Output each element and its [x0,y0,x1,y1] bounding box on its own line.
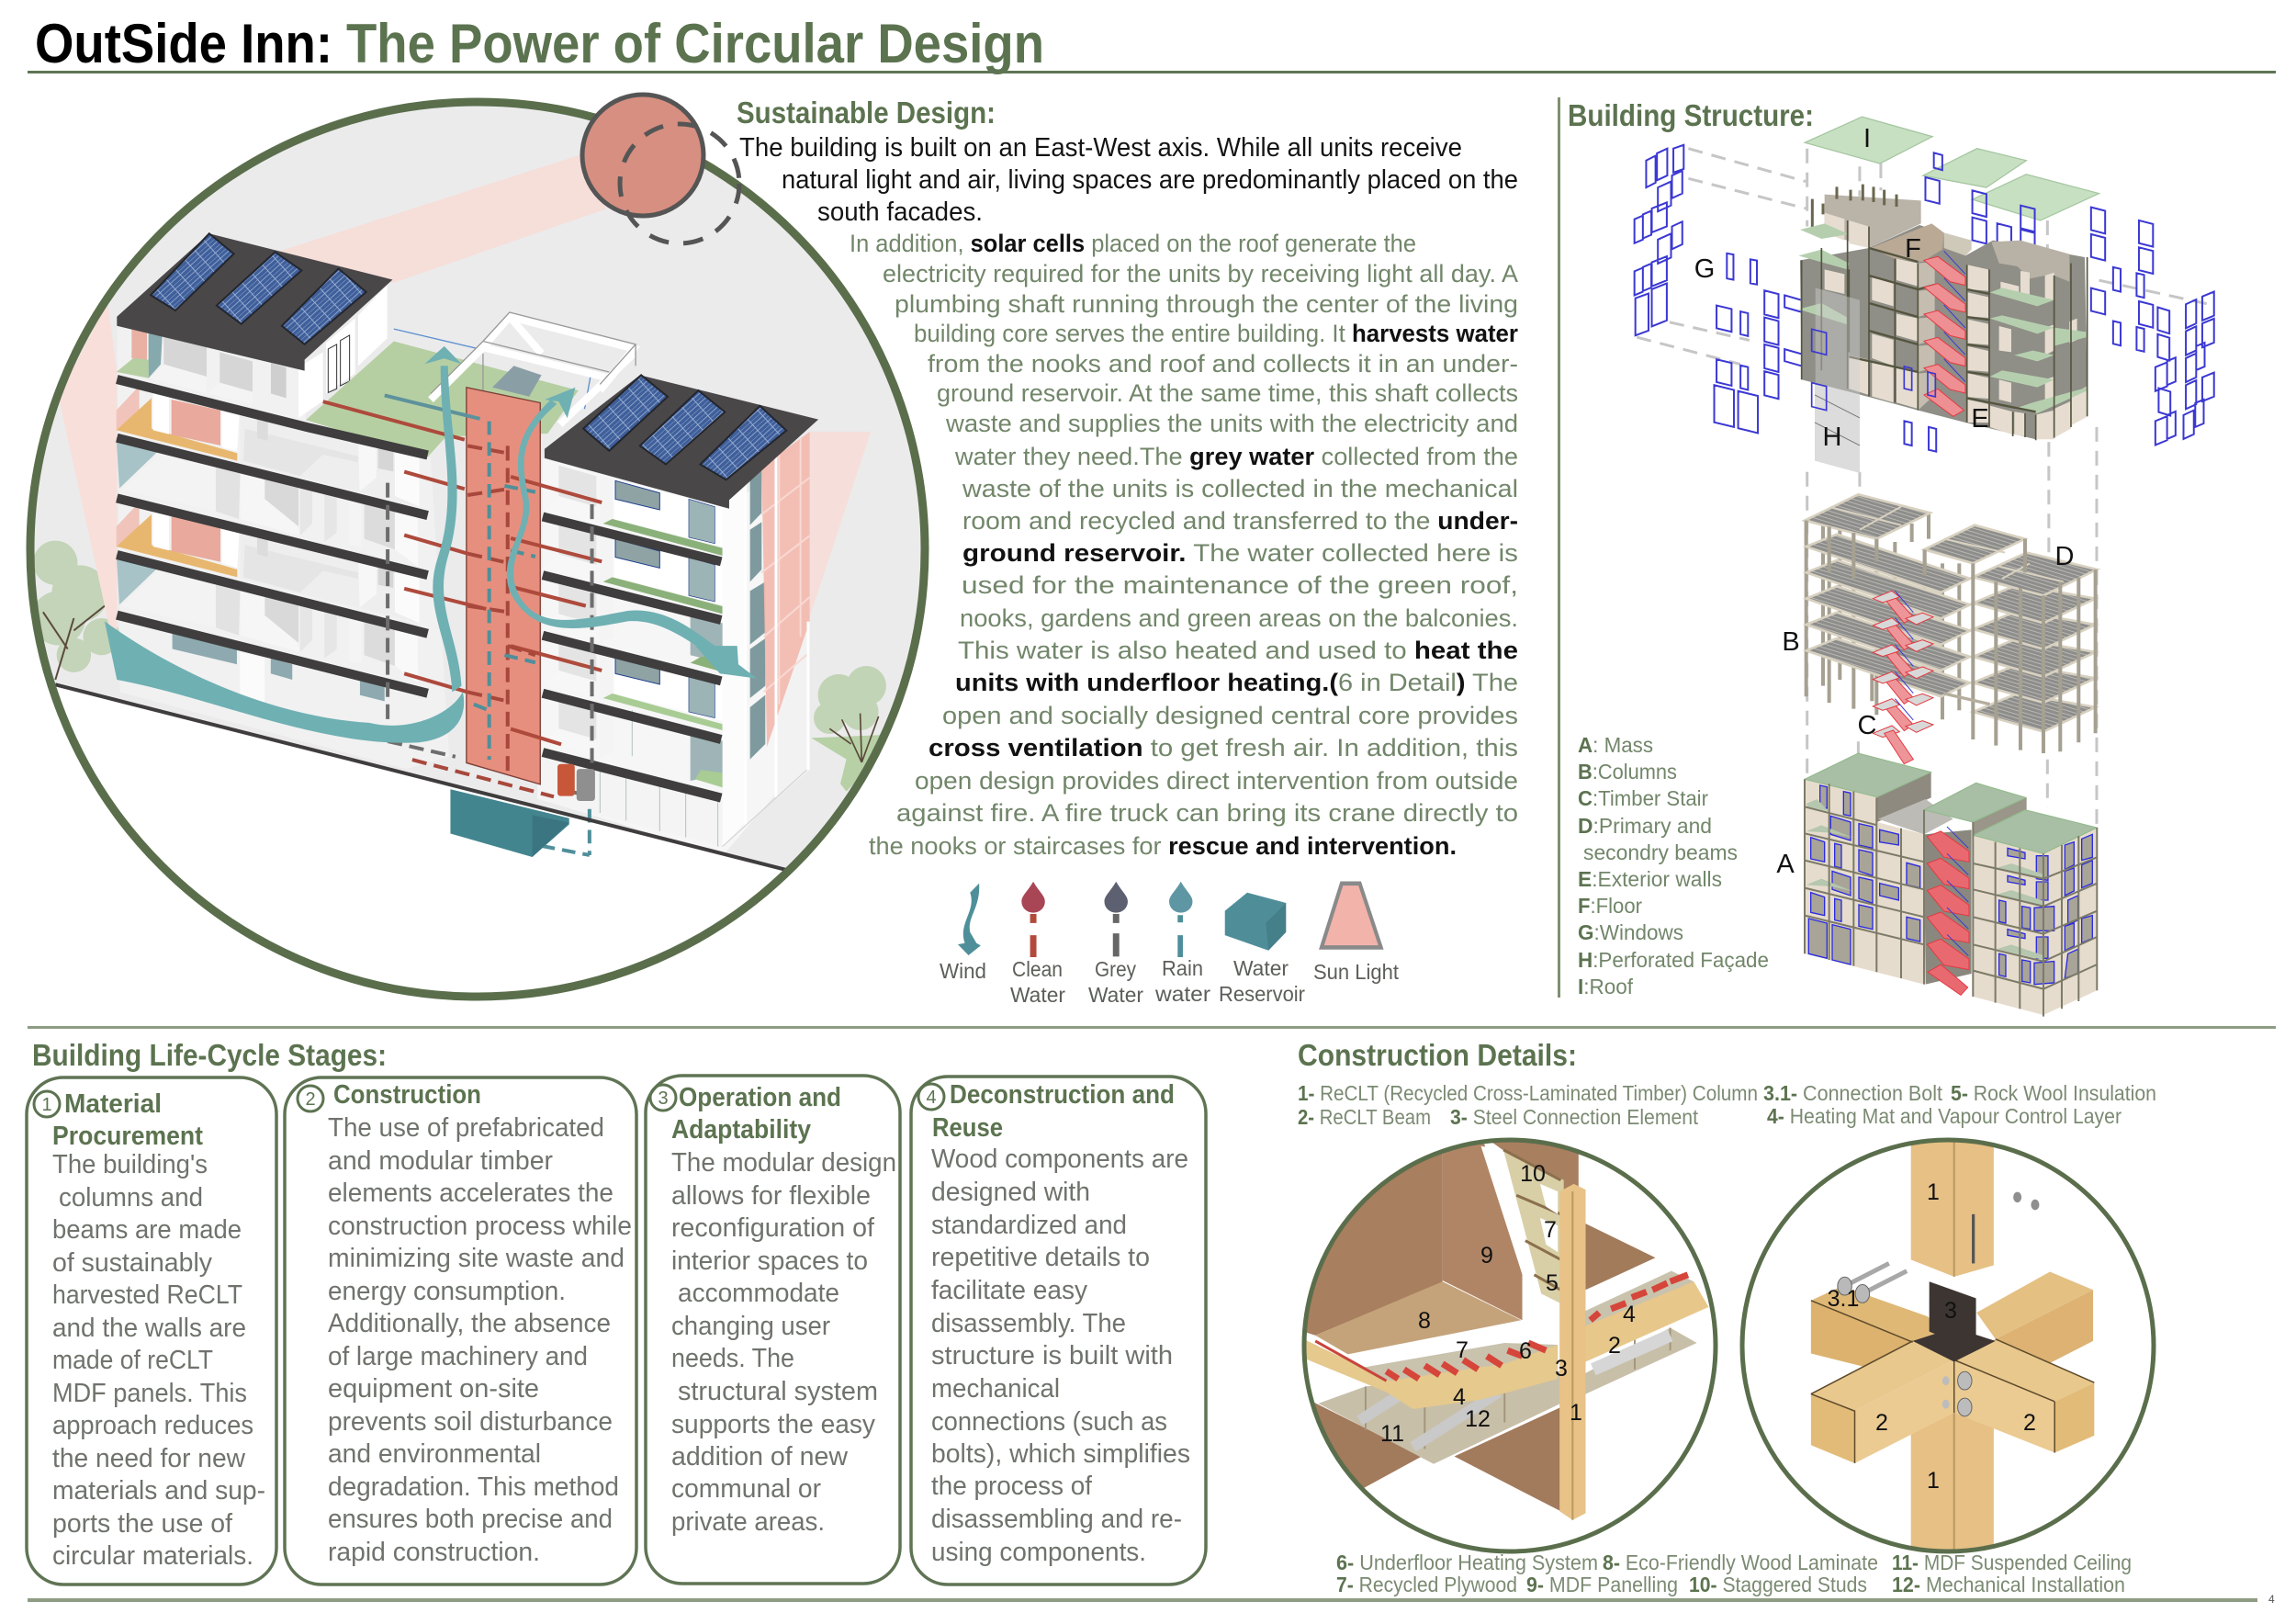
stage 3: interior spaces to [671,1246,868,1276]
icon: grey water [1105,882,1128,956]
numbers: 2 [1875,1410,1888,1436]
body text: ground reservoir. The water collected here is [962,539,1518,567]
scene border [30,102,925,997]
bottom key: 12- Mechanical Installation [1892,1573,2125,1596]
stage 3: reconfiguration of [671,1213,875,1243]
body text: open design provides direct intervention from outside [915,767,1518,795]
legend labels: Sun Light [1313,960,1400,984]
legend: flows [940,882,1400,1007]
stage 1: the need for new [52,1444,246,1473]
structure letters: B [1782,627,1800,657]
structure letters: H [1823,423,1841,452]
body text: electricity required for the units by receiving light all day. A [883,260,1518,288]
numbers: 4 [1623,1302,1636,1327]
stage 1: MDF panels. This [52,1379,247,1408]
legend labels: Wind [940,959,986,983]
stage 1: The building's [52,1150,208,1179]
stage 1: approach reduces [52,1411,253,1440]
numbers: 3 [1944,1298,1957,1324]
structure letters: G [1694,254,1715,284]
frame layer [1805,494,2097,764]
stage 3: The modular design [671,1148,896,1178]
structure letters: I [1863,124,1871,153]
stage 2: The use of prefabricated [328,1113,604,1143]
stage 1: 1 [41,1095,52,1115]
body text: against fire. A fire truck can bring its crane directly to [896,799,1518,827]
stage 1: harvested ReCLT [52,1280,242,1310]
heading: Building Structure: [1568,98,1814,132]
stage 1 [27,1077,276,1585]
stage 1: circular materials. [52,1541,253,1571]
roof, core and flows [55,233,818,872]
legend labels: Clean [1012,957,1063,981]
stage 2: elements accelerates the [328,1179,613,1208]
page number: 4 [2268,1593,2275,1606]
body text: This water is also heated and used to heat the [958,637,1518,664]
stage 1: and the walls are [52,1314,246,1343]
stage 3: allows for flexible [671,1181,871,1211]
structure key: C:Timber Stair [1578,786,1708,810]
stage 2: prevents soil disturbance [328,1407,613,1437]
stage 4: designed with [931,1178,1090,1207]
stage 4 [911,1077,1206,1585]
bottom key: 7- Recycled Plywood [1336,1573,1517,1596]
detail: floor wall section [1298,1138,1716,1551]
bottom key: 10- Staggered Studs [1689,1573,1867,1596]
stage 2: energy consumption. [328,1277,566,1306]
stage 2: and modular timber [328,1146,553,1176]
bottom key: 8- Eco-Friendly Wood Laminate [1603,1551,1878,1574]
top key [1298,1081,2156,1129]
stage 4: mechanical [931,1374,1060,1404]
numbers: 7 [1456,1337,1469,1363]
numbers: 2 [1608,1333,1621,1359]
stage 1: columns and [59,1183,203,1212]
title [35,13,1044,74]
structure key: F:Floor [1578,894,1642,918]
panel: construction details [1298,1038,2156,1596]
structure key [1578,733,1769,998]
top key: 1- ReCLT (Recycled Cross-Laminated Timber) Column [1298,1081,1758,1105]
detail: steel connection [1742,1138,2154,1551]
exploded axonometric drawing [1635,117,2214,1017]
stage 3: addition of new [671,1442,849,1472]
stage 1: materials and sup- [52,1476,265,1506]
legend labels: Water [1233,956,1289,980]
title: OutSide Inn: [35,13,332,74]
stage 3: structural system [678,1377,878,1406]
legend labels: Rain [1162,956,1203,980]
bottom key [1336,1551,2132,1596]
body text: waste of the units is collected in the mechanical [962,475,1518,502]
numbers: 4 [1453,1384,1466,1410]
stage 1: Material [64,1089,162,1119]
heading: Building Life-Cycle Stages: [32,1038,387,1072]
body text: open and socially designed central core provides [942,702,1518,729]
structure letters: D [2055,542,2074,571]
body text: building core serves the entire building. It harvests water [914,320,1518,347]
structure key: secondry beams [1583,840,1738,864]
exploded floors and walls [1798,185,2088,473]
stage 4: Wood components are [931,1145,1188,1174]
numbers: 5 [1546,1270,1559,1296]
stage 2: and environmental [328,1439,541,1469]
stage 2: degradation. This method [328,1472,619,1502]
mass layer [1805,753,2097,1017]
panel: building structure [1568,98,2214,1017]
body text: used for the maintenance of the green roof, [962,571,1518,599]
stage 4: standardized and [931,1211,1127,1240]
stage 2: rapid construction. [328,1538,540,1567]
numbers [1828,1179,2036,1494]
legend labels: Water [1088,983,1143,1007]
body text: ground reservoir. At the same time, this shaft collects [937,379,1518,407]
intro text: south facades. [817,197,983,227]
structure key: E:Exterior walls [1578,867,1722,891]
stage 1: ports the use of [52,1509,233,1539]
legend labels: Water [1010,983,1065,1007]
legend labels: water [1154,982,1210,1006]
heading: Sustainable Design: [737,96,996,130]
icon: rain water [1169,882,1192,957]
icon: clean water [1021,882,1045,957]
structure letters: A [1776,850,1795,879]
stage 3: accommodate [678,1279,839,1308]
stage 3: supports the easy [671,1410,875,1439]
guides, roof plates and windows [1635,117,2214,825]
icon: sun light [1322,884,1381,947]
stage 1: made of reCLT [52,1346,213,1375]
stage 4: Deconstruction and [950,1080,1175,1110]
panel: life-cycle stages [27,1038,1206,1585]
numbers: 6 [1519,1338,1532,1364]
stage 1: beams are made [52,1215,242,1245]
structure letters: E [1971,404,1989,434]
bottom key: 11- MDF Suspended Ceiling [1892,1551,2132,1574]
body text: cross ventilation to get fresh air. In addition, this [929,734,1518,761]
structure key: I:Roof [1578,975,1634,998]
body text: from the nooks and roof and collects it in an under- [928,350,1518,378]
legend labels: Reservoir [1219,982,1305,1006]
heading: Construction Details: [1298,1038,1577,1072]
numbers: 3 [1555,1356,1568,1382]
numbers: 1 [1927,1179,1940,1205]
stage 3: Adaptability [671,1115,811,1145]
icon: wind [958,884,981,955]
stage 4: connections (such as [931,1407,1167,1437]
body text: room and recycled and transferred to the under- [962,507,1518,535]
intro text: natural light and air, living spaces are predominantly placed on the [782,165,1518,195]
stage 2: construction process while [328,1212,632,1241]
numbers: 3.1 [1828,1286,1859,1312]
stage 2: ensures both precise and [328,1505,613,1534]
stage 4: the process of [931,1472,1093,1501]
stage 4: disassembling and re- [931,1505,1182,1534]
stage 2: minimizing site waste and [328,1244,625,1273]
top key: 3- Steel Connection Element [1450,1105,1699,1129]
numbers [1380,1161,1636,1447]
intro text [739,133,1518,227]
structure letters: C [1858,711,1876,740]
stage 3: communal or [671,1474,821,1504]
stage 4: structure is built with [931,1341,1173,1370]
stage 1: of sustainably [52,1248,212,1278]
left block rooms [117,285,420,682]
stage 2: Additionally, the absence [328,1309,611,1338]
numbers: 9 [1480,1243,1493,1269]
title: The Power of Circular Design [346,13,1044,74]
structure key: D:Primary and [1578,814,1712,838]
stage 2: 2 [305,1089,316,1110]
numbers: 2 [2023,1410,2036,1436]
top key: 2- ReCLT Beam [1298,1105,1431,1129]
body text: nooks, gardens and green areas on the balconies. [960,604,1518,632]
stage 2: equipment on-site [328,1374,539,1404]
stage 4: disassembly. The [931,1309,1126,1338]
body text [850,230,1518,860]
numbers: 1 [1927,1468,1940,1494]
structure key: B:Columns [1578,760,1677,784]
body text: units with underfloor heating.( 6 in Detail ) The [955,669,1518,696]
stage 3: 3 [658,1088,669,1109]
stage 2: Construction [333,1080,481,1110]
stage 4: facilitate easy [931,1276,1087,1305]
legend labels [940,956,1400,1007]
stage 2 [285,1077,636,1585]
stage 3 [646,1076,900,1584]
stage 3: Operation and [679,1083,841,1112]
stage 3: needs. The [671,1344,794,1373]
stage 3: private areas. [671,1507,825,1537]
stage 4: 4 [926,1088,937,1108]
numbers: 8 [1418,1308,1431,1334]
structure key: G:Windows [1578,920,1683,944]
stage 3: changing user [671,1312,830,1341]
intro text: The building is built on an East-West axis. While all units receive [739,133,1462,163]
stage 4: repetitive details to [931,1243,1150,1272]
stage 4: using components. [931,1538,1146,1567]
bottom key: 6- Underfloor Heating System [1336,1551,1598,1574]
structure letters [1694,124,2074,879]
body text: water they need.The grey water collected from the [954,443,1518,470]
body text: waste and supplies the units with the electricity and [945,410,1518,437]
top key: 4- Heating Mat and Vapour Control Layer [1767,1104,2122,1128]
stage 4: Reuse [932,1113,1003,1143]
stage 2: of large machinery and [328,1342,588,1371]
numbers: 11 [1380,1421,1404,1447]
structure letters: F [1905,234,1921,264]
right block rooms [537,432,886,847]
panel: sustainable design text [737,96,1518,860]
top key: 5- Rock Wool Insulation [1951,1081,2156,1105]
numbers: 10 [1520,1161,1546,1187]
illustration: sustainable building section in circle [18,92,937,1024]
legend labels: Grey [1095,957,1136,981]
body text: the nooks or staircases for rescue and intervention. [869,832,1457,860]
numbers: 7 [1544,1217,1557,1243]
icon: reservoir [1225,893,1286,951]
top key: 3.1- Connection Bolt [1763,1081,1943,1105]
stage 4: bolts), which simplifies [931,1439,1190,1469]
structure key: H:Perforated Façade [1578,948,1769,972]
structure key: A: Mass [1578,733,1653,757]
body text: plumbing shaft running through the center of the living [895,290,1518,318]
numbers: 12 [1465,1406,1491,1432]
body text: In addition, solar cells placed on the roof generate the [850,230,1416,257]
bottom key: 9- MDF Panelling [1526,1573,1678,1596]
numbers: 1 [1570,1400,1582,1426]
stage 1: Procurement [52,1122,203,1151]
sun [582,95,739,243]
